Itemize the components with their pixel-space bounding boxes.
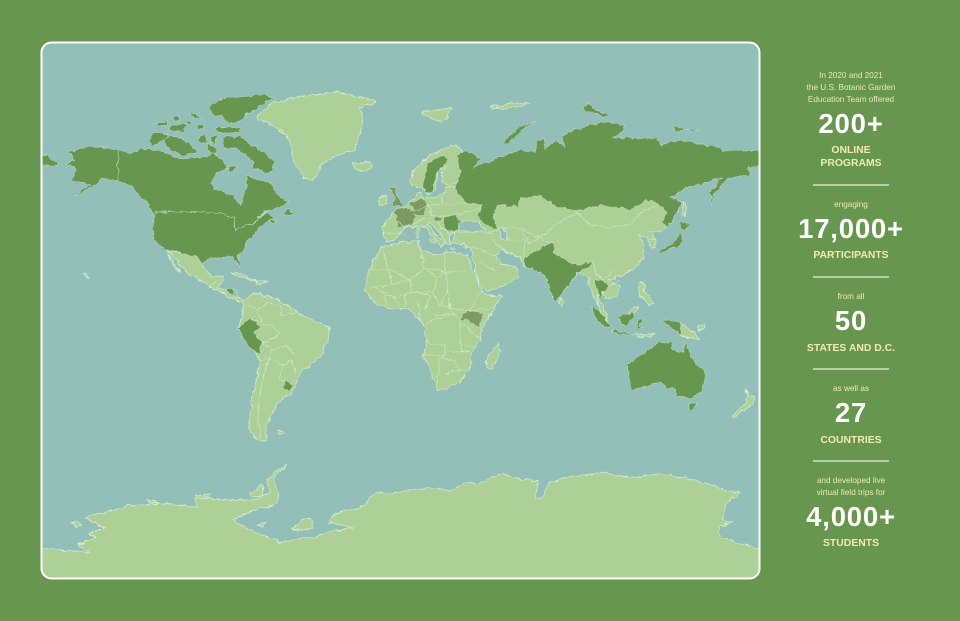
Hispaniola [256, 280, 268, 284]
Greenland [257, 92, 377, 181]
label: countries: COUNTRIES [820, 435, 882, 446]
olive land: France, Germany, UK, Kenya, Uganda, Hungary [390, 187, 483, 327]
stat: 27: 27 [835, 397, 867, 428]
sidebar: statistics [798, 71, 904, 549]
Java [612, 330, 637, 335]
Russia [455, 122, 762, 230]
Iceland [352, 162, 373, 171]
Antarctic islands [72, 518, 313, 530]
dark land: countries reached [38, 95, 762, 411]
text: virtual field trips: virtual field trips for [817, 488, 885, 497]
Western New Guinea [662, 320, 681, 335]
divider 2 [813, 276, 889, 278]
New Britain [698, 324, 704, 331]
all land masses [38, 92, 765, 590]
intro text [806, 71, 895, 104]
Malay peninsula [597, 296, 608, 320]
Africa [365, 241, 502, 390]
country borders [118, 150, 660, 438]
Hungary [433, 216, 443, 221]
label: online programs: PROGRAMS [820, 158, 882, 169]
North America: United States and Canada [67, 146, 288, 267]
United Kingdom [390, 187, 403, 207]
stat: 50: 50 [835, 305, 867, 336]
Nicaragua [226, 288, 233, 296]
Kenya and Uganda [460, 310, 483, 327]
South America [238, 293, 330, 440]
Novaya Zemlya [503, 122, 537, 145]
stat: 17,000+: 17,000+ [798, 213, 904, 244]
Australia [627, 342, 706, 398]
Svalbard [421, 108, 453, 123]
Mexico and Central America [167, 252, 247, 303]
Mediterranean islands [416, 228, 468, 250]
text: as well as: as well as [833, 384, 869, 393]
Madagascar [486, 343, 500, 368]
Sardinia, Corsica, Sicily, Crete, Cyprus [416, 228, 468, 250]
Tasmania [688, 402, 697, 411]
Europe and Asia [382, 180, 682, 320]
Borneo [618, 312, 635, 325]
light land: countries not reached [38, 92, 765, 590]
intro text: the U.S. Botanic Garden [807, 83, 895, 92]
stat: 200+: 200+ [818, 108, 884, 139]
New Zealand [732, 390, 755, 418]
Falkland Islands [278, 431, 285, 434]
intro text: In 2020 and 2021 [819, 71, 883, 80]
France [392, 208, 415, 227]
Baja California [168, 255, 181, 272]
panel border [42, 42, 760, 578]
label: states and D.C.: STATES AND D.C. [807, 343, 895, 354]
Black Sea [458, 220, 485, 232]
label: online programs: ONLINE [831, 145, 871, 156]
label: online programs [820, 145, 882, 169]
label: students: STUDENTS [823, 538, 879, 549]
Peru [238, 319, 262, 355]
Canadian Arctic islands [150, 95, 294, 224]
Ireland [379, 195, 387, 206]
Philippines [639, 281, 653, 306]
Hawaii [82, 273, 90, 278]
Sumatra [591, 307, 612, 328]
stat: 4,000+: 4,000+ [806, 501, 896, 532]
intro text: Education Team offered [808, 95, 894, 104]
Uruguay [284, 381, 293, 391]
Borneo north [628, 306, 638, 316]
Franz Josef Land [490, 102, 530, 109]
Caspian Sea [498, 227, 507, 240]
text: from all: from all [838, 292, 864, 301]
Sulawesi [638, 320, 643, 328]
India and Pakistan [523, 243, 592, 302]
Antarctic Peninsula islands [146, 484, 264, 503]
inland seas [458, 220, 507, 240]
Antarctica [42, 464, 758, 578]
lesser islands [637, 333, 655, 337]
Sakhalin [683, 201, 686, 216]
divider 4 [813, 460, 889, 462]
text: virtual field trips [816, 476, 886, 497]
divider 3 [813, 368, 889, 370]
Japan [660, 221, 690, 253]
text: engaging: engaging [834, 200, 868, 209]
divider 1 [813, 184, 889, 186]
Thailand [595, 280, 610, 300]
Papua New Guinea [680, 322, 700, 340]
Germany [410, 198, 428, 215]
panel: world map [40, 42, 760, 580]
Scandinavia and Finland [410, 145, 462, 195]
text: virtual field trips: and developed live [817, 476, 885, 485]
Romania and Bulgaria [443, 215, 463, 232]
Russian Arctic islands [583, 104, 700, 132]
label: participants: PARTICIPANTS [813, 250, 889, 261]
Sweden [423, 155, 447, 193]
Cuba [230, 272, 256, 283]
Chukotka on left edge [42, 154, 58, 166]
Sri Lanka [559, 297, 563, 306]
